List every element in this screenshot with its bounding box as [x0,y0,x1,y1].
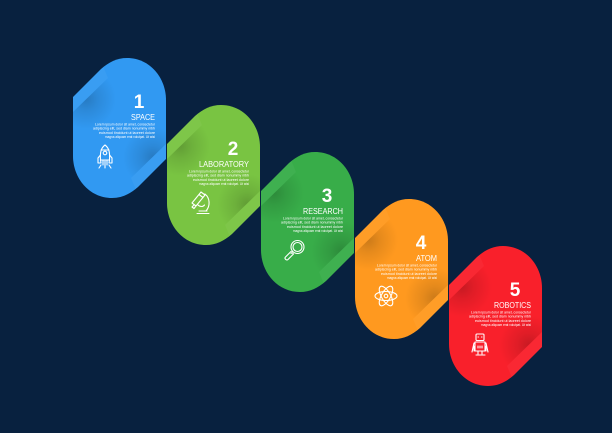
text block: step 3 description: adipiscing elit, sed diam nonummy nibh [281,220,343,224]
text block: step 4 description [375,264,438,280]
heading: laboratory: LABORATORY [199,160,250,169]
icon: magnifier [285,240,304,260]
number 3: 3 [322,186,332,207]
text block: step 3 description [281,216,344,233]
text block: step 2 description: euismod tincidunt ut laoreet dolore [193,178,249,182]
icon: robot [472,334,488,355]
text block: step 2 description: Lorem ipsum dolor sit amet, consectetur [189,170,250,174]
heading: atom: ATOM [416,254,437,263]
text block: step 1 description: Lorem ipsum dolor sit amet, consectetur [95,122,156,126]
text block: step 5 description: Lorem ipsum dolor sit amet, consectetur [471,310,532,314]
text block: step 3 description: euismod tincidunt ut laoreet dolore [287,225,343,229]
text block: step 5 description: magna aliquam erat volutpat. Ut wisi [481,323,531,327]
text block: step 4 description: euismod tincidunt ut laoreet dolore [381,272,437,276]
text block: step 5 description: adipiscing elit, sed diam nonummy nibh [469,314,531,318]
panel: step 4 atom [355,199,448,339]
panel: step 5 robotics [449,246,542,386]
text block: step 3 description: magna aliquam erat volutpat. Ut wisi [293,229,343,233]
text block: step 2 description: magna aliquam erat volutpat. Ut wisi [199,182,249,186]
heading: research: RESEARCH [303,207,343,216]
number 1: 1 [134,92,145,113]
number 4: 4 [416,233,427,254]
text block: step 5 description [469,310,532,327]
panel: step 3 research [261,152,354,292]
heading: robotics: ROBOTICS [494,301,531,310]
text block: step 1 description [93,122,156,139]
icon: microscope [192,192,209,214]
text block: step 2 description: adipiscing elit, sed diam nonummy nibh [187,174,249,178]
panel: step 1 space [73,58,166,198]
text block: step 4 description: Lorem ipsum dolor sit amet, consectetur [377,264,438,268]
icon: rocket [98,145,112,168]
text block: step 1 description: adipiscing elit, sed diam nonummy nibh [93,126,155,130]
text block: step 3 description: Lorem ipsum dolor sit amet, consectetur [283,216,344,220]
icon: atom [375,284,397,308]
text block: step 4 description: magna aliquam erat volutpat. Ut wisi [387,276,437,280]
number 2: 2 [228,139,238,160]
text block: step 4 description: adipiscing elit, sed diam nonummy nibh [375,268,437,272]
panel: step 2 laboratory [167,105,260,245]
text block: step 1 description: magna aliquam erat volutpat. Ut wisi [105,135,155,139]
number 5: 5 [510,280,521,301]
text block: step 1 description: euismod tincidunt ut laoreet dolore [99,131,155,135]
text block: step 2 description [187,170,250,186]
heading: space: SPACE [131,113,155,122]
text block: step 5 description: euismod tincidunt ut laoreet dolore [475,319,531,323]
